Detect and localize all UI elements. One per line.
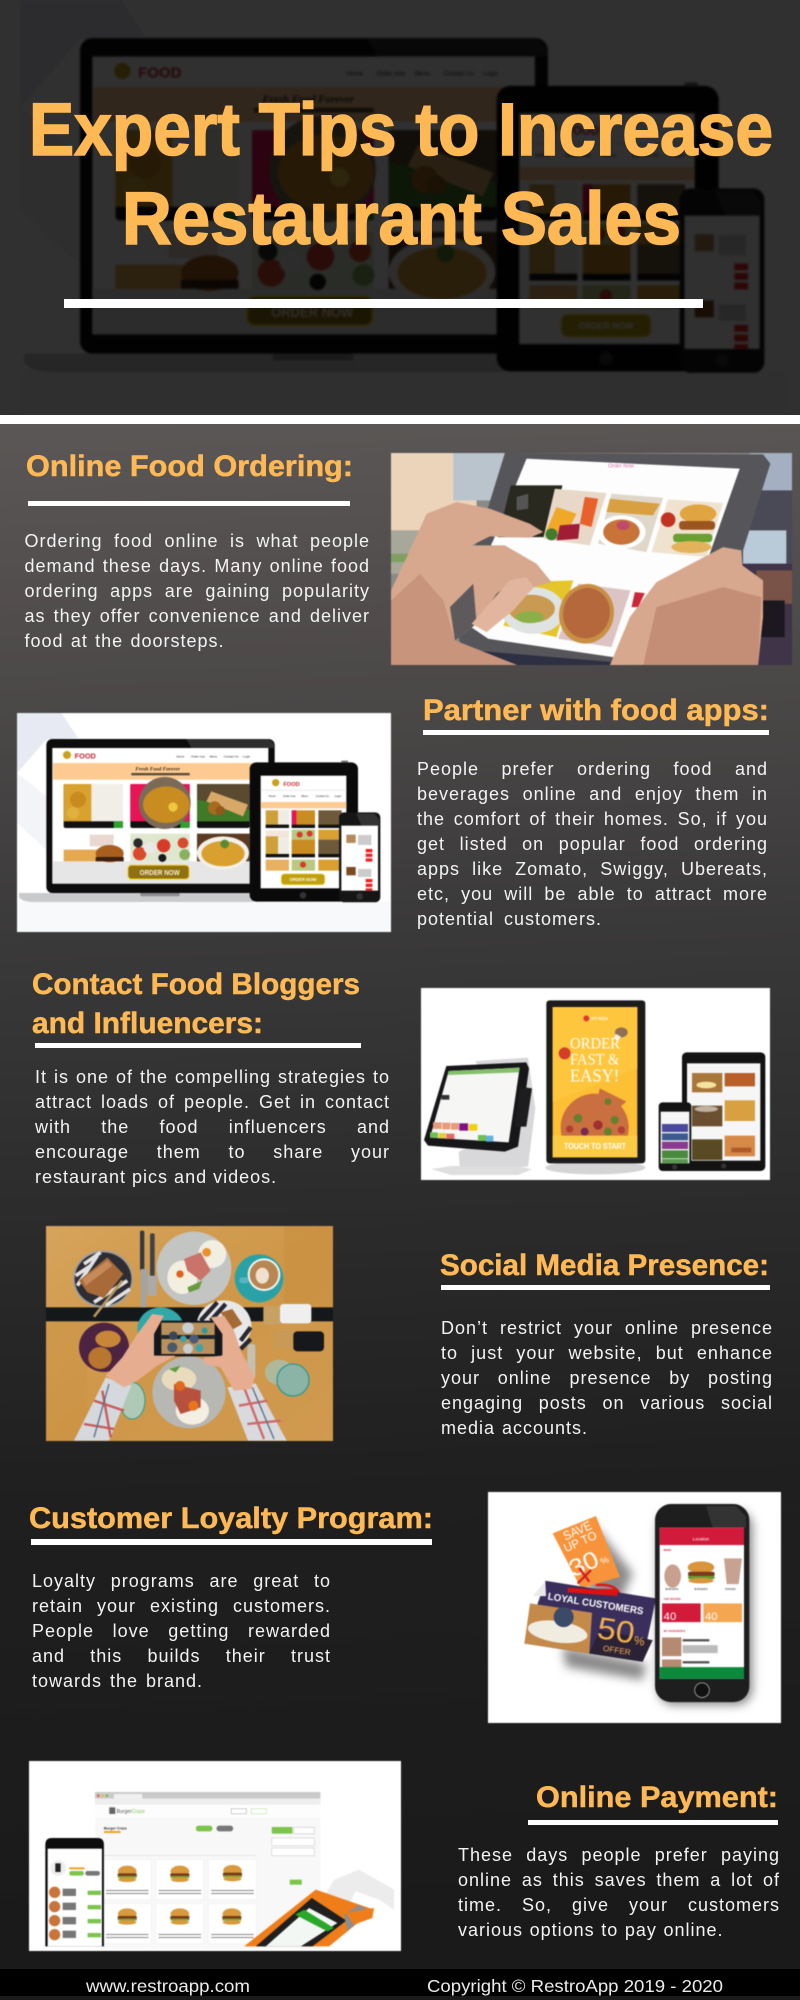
hands <box>106 1314 176 1387</box>
text block: get listed on popular food ordering <box>417 834 768 854</box>
panel: contact food bloggers and influencers <box>32 968 771 1187</box>
text block: food at the doorsteps. <box>24 631 224 651</box>
heading underline <box>34 1043 361 1048</box>
text block: potential customers. <box>417 909 602 929</box>
bottles <box>263 1306 283 1325</box>
image: loyalty offers and phone app: 40 <box>705 1611 718 1623</box>
heading: Online Food Ordering: <box>26 450 352 483</box>
loyal card <box>524 1581 656 1662</box>
lower plates <box>137 1307 184 1351</box>
image: laptop tablet phone mockup: Order now <box>283 794 296 798</box>
text block: ordering apps are gaining popularity <box>24 581 370 601</box>
text block: apps like Zomato, Swiggy, Ubereats, <box>417 859 768 879</box>
image: loyalty offers and phone app: BURGERS <box>665 1587 679 1591</box>
image: laptop tablet phone mockup: ORDER NOW <box>290 877 317 882</box>
text block <box>417 759 768 929</box>
text block <box>458 1845 780 1940</box>
text block: the comfort of their homes. So, if you <box>417 809 768 829</box>
heading underline <box>441 1285 770 1290</box>
image: laptop tablet phone mockup: Home <box>177 755 185 759</box>
image: laptop tablet phone mockup: Fresh Food Forever <box>136 767 181 773</box>
image: pos kiosk tablet phone: TOUCH TO START <box>564 1142 626 1151</box>
ribbon <box>566 1585 619 1593</box>
text block: media accounts. <box>441 1418 588 1438</box>
text block: These days people prefer paying <box>458 1845 780 1865</box>
text block <box>441 1318 773 1438</box>
text block: to just your website, but enhance <box>441 1343 773 1363</box>
kiosk <box>545 1161 645 1174</box>
heading underline <box>28 500 350 506</box>
image: web app phone and pos: Burger <box>117 1809 132 1815</box>
text block: demand these days. Many online food <box>24 556 370 576</box>
heading: Contact Food Bloggers <box>32 968 360 1001</box>
phone in hands <box>152 1321 223 1356</box>
heading: Partner with food apps: <box>423 694 769 727</box>
striped plate <box>73 1250 133 1308</box>
footer website and copyright: www.restroapp.com <box>85 1976 250 1996</box>
glass left <box>120 1382 145 1419</box>
image: overhead food table <box>45 1225 334 1442</box>
image: web app phone and pos: Craze <box>132 1809 145 1815</box>
background image: dimmed devices <box>24 36 766 374</box>
order now button <box>128 866 189 879</box>
image: laptop tablet phone mockup: Contact Us <box>316 794 330 798</box>
tablet screen <box>457 458 740 657</box>
phone <box>659 1102 691 1171</box>
text block: your online presence by posting <box>441 1368 773 1388</box>
image: loyalty offers and phone app: MY FAVOURITES <box>664 1629 685 1633</box>
image: loyalty offers and phone app: 40 <box>664 1611 676 1623</box>
image: pos kiosk tablet phone <box>420 987 771 1181</box>
image: laptop tablet phone mockup: Menu <box>210 755 218 759</box>
text block <box>35 1067 390 1187</box>
heading: Social Media Presence: <box>440 1249 769 1282</box>
text block: with the food influencers and <box>35 1117 390 1137</box>
image: pos kiosk tablet phone: EASY! <box>570 1066 619 1086</box>
text block: People prefer ordering food and <box>417 759 768 779</box>
title underline <box>64 299 703 308</box>
text block: restaurant pics and videos. <box>35 1167 277 1187</box>
image: web app phone and pos <box>28 1760 402 1952</box>
bottom plate <box>152 1356 226 1428</box>
heading underline <box>423 730 769 735</box>
text block: etc, you will be able to attract more <box>417 884 768 904</box>
image: loyalty offers and phone app: % <box>633 1633 646 1649</box>
text block: time. So, give your customers <box>458 1895 780 1915</box>
text block: various options to pay online. <box>458 1920 724 1940</box>
image: loyalty offers and phone app: BURGERS <box>694 1587 708 1591</box>
text block: Don’t restrict your online presence <box>441 1318 773 1338</box>
coffee <box>235 1254 283 1302</box>
text block: as they offer convenience and deliver <box>24 606 370 626</box>
text block: towards the brand. <box>32 1671 203 1691</box>
heading: Customer Loyalty Program: <box>29 1502 433 1535</box>
image: laptop tablet phone mockup: Order now <box>191 755 206 759</box>
tablet <box>682 1052 765 1171</box>
food cells row 1 <box>64 784 123 828</box>
image: hands on tablet <box>390 452 793 666</box>
image: laptop tablet phone mockup: FOOD <box>75 752 96 761</box>
text block: online as this saves them a lot of <box>458 1870 780 1890</box>
hands <box>391 502 763 665</box>
panel: online food ordering <box>24 450 793 666</box>
panel: social media presence <box>45 1225 773 1442</box>
text block: attract loads of people. Get in contact <box>35 1092 390 1112</box>
image: loyalty offers and phone app: OFFER <box>602 1644 632 1657</box>
egg plate <box>157 1232 231 1305</box>
sleeves <box>74 1377 131 1441</box>
image: loyalty offers and phone app: % <box>599 1554 610 1567</box>
image: laptop tablet phone mockup: ORDER NOW <box>140 870 180 877</box>
purple plate <box>79 1323 129 1372</box>
text block: beverages online and enjoy them in <box>417 784 768 804</box>
phone <box>339 813 381 903</box>
image: loyalty offers and phone app: SAVE <box>561 1518 594 1543</box>
text block: encourage them to share your <box>35 1142 390 1162</box>
image: pos kiosk tablet phone: CITY PIZZA <box>590 1016 609 1021</box>
text block: engaging posts on various social <box>441 1393 773 1413</box>
header banner <box>0 0 800 415</box>
title: Restaurant Sales <box>122 177 681 260</box>
image: loyalty offers and phone app: 30 <box>565 1546 603 1583</box>
cutlery <box>140 1231 144 1271</box>
left phone <box>45 1838 104 1946</box>
text block: It is one of the compelling strategies to <box>35 1067 390 1087</box>
image: web app phone and pos: Burger Craze <box>104 1826 127 1830</box>
tablet <box>250 763 358 902</box>
image: laptop tablet phone mockup: Login <box>335 794 342 798</box>
browser <box>95 1792 320 1949</box>
image: laptop tablet phone mockup <box>16 712 392 933</box>
image: hands on tablet: Order Now <box>608 463 634 469</box>
image: pos kiosk tablet phone: FAST & <box>570 1051 619 1068</box>
tablet body <box>450 452 770 665</box>
footer website and copyright <box>85 1976 723 1996</box>
heading <box>32 968 360 1040</box>
shadows <box>563 1510 753 1705</box>
glass <box>265 1360 293 1385</box>
text block <box>32 1571 331 1691</box>
footer bar <box>0 1968 800 1996</box>
text block: and this builds their trust <box>32 1646 331 1666</box>
pos device <box>244 1890 374 1946</box>
text block: Loyalty programs are great to <box>32 1571 331 1591</box>
food row <box>664 1564 681 1588</box>
heading: and Influencers: <box>32 1007 263 1040</box>
heading underline <box>528 1820 778 1825</box>
heading underline <box>31 1539 432 1544</box>
image: loyalty offers and phone app: 50 <box>595 1611 637 1651</box>
orange tag <box>553 1516 620 1588</box>
image: loyalty offers and phone app: UP TO <box>562 1528 599 1555</box>
image: loyalty offers and phone app <box>487 1491 782 1724</box>
panel: partner with food apps <box>16 694 769 933</box>
image: loyalty offers and phone app: Location <box>693 1537 710 1542</box>
image: laptop tablet phone mockup: Login <box>243 755 251 759</box>
text block: Ordering food online is what people <box>24 531 370 551</box>
food cells row 2 <box>90 835 114 847</box>
heading: Online Payment: <box>536 1781 778 1814</box>
title <box>29 88 773 260</box>
panel: customer loyalty program <box>29 1491 782 1724</box>
image: laptop tablet phone mockup: Home <box>269 794 277 798</box>
image: laptop tablet phone mockup: Menu <box>302 794 309 798</box>
text block: retain your existing customers. <box>32 1596 331 1616</box>
image: loyalty offers and phone app: SHAKES <box>725 1587 736 1591</box>
phone <box>655 1504 749 1702</box>
pos terminal <box>431 1166 532 1175</box>
white divider band <box>0 415 800 424</box>
image: laptop tablet phone mockup: FOOD <box>284 782 300 788</box>
image: loyalty offers and phone app: MENU <box>664 1548 672 1552</box>
image: loyalty offers and phone app: TOP OFFERS <box>664 1597 681 1601</box>
panel: online payment <box>28 1760 780 1952</box>
image: loyalty offers and phone app: LOYAL CUSTOMERS <box>547 1592 644 1618</box>
text block <box>24 531 370 651</box>
footer website and copyright: Copyright © RestroApp 2019 - 2020 <box>427 1976 723 1996</box>
laptop <box>47 739 275 893</box>
text block: People love getting rewarded <box>32 1621 331 1641</box>
image: pos kiosk tablet phone: ORDER <box>570 1035 621 1052</box>
receipt <box>322 1870 394 1915</box>
image: laptop tablet phone mockup: Contact Us <box>224 755 239 759</box>
